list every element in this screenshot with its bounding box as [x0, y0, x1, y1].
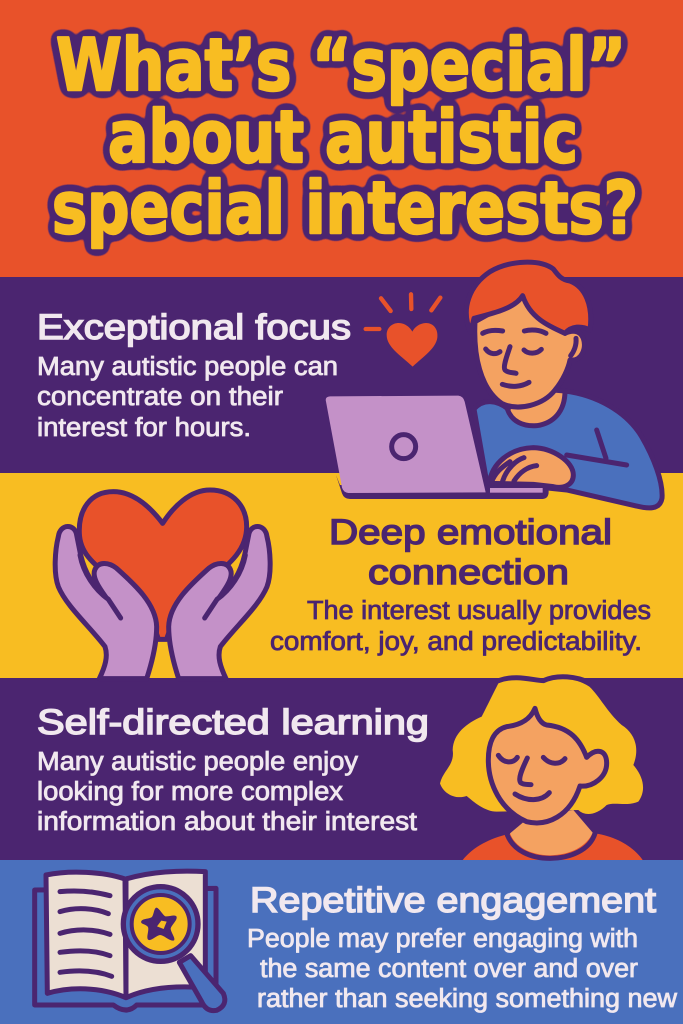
text block: repetitive engagement: Repetitive engagement: [250, 880, 656, 920]
text block: self-directed learning: Many autistic people enjoy: [37, 748, 358, 776]
text block: deep emotional connection: The interest usually provides: [307, 597, 651, 625]
hair: [440, 678, 643, 814]
neck: [507, 833, 595, 858]
text lines: [60, 891, 112, 976]
text block: exceptional focus: interest for hours.: [37, 414, 251, 442]
facial features: [498, 755, 565, 800]
text block: self-directed learning: information about their interest: [37, 808, 417, 836]
panel: deep emotional connection band: [0, 473, 683, 679]
icon: woman with curly hair: [440, 677, 643, 860]
text block: repetitive engagement: the same content over and over: [260, 955, 639, 983]
title: [52, 23, 638, 250]
panel: repetitive engagement band: [0, 860, 683, 1024]
hand on keyboard: [489, 448, 573, 487]
book cover: [35, 888, 216, 1010]
text block: deep emotional connection: connection: [368, 552, 569, 592]
text block: repetitive engagement: People may prefer engaging with: [247, 925, 638, 953]
text block: self-directed learning: Self-directed learning: [37, 702, 429, 742]
neck: [507, 388, 565, 426]
icon: hands holding heart: [55, 490, 270, 679]
hair: [466, 262, 591, 333]
text block: repetitive engagement: rather than seeking something new: [257, 985, 678, 1013]
magnifier glass: [123, 887, 198, 961]
text block: exceptional focus: Exceptional focus: [37, 307, 351, 347]
text block: exceptional focus: [37, 307, 351, 442]
title: about autistic: [108, 95, 578, 179]
panel: exceptional focus band: [0, 277, 683, 474]
heart: [79, 490, 247, 639]
ear detail: [571, 338, 576, 356]
laptop: [326, 396, 549, 499]
right hand: [169, 526, 270, 679]
text block: deep emotional connection: [270, 512, 651, 656]
icon: glowing heart: [366, 294, 440, 367]
icon: person at laptop with heart: [326, 262, 662, 508]
face: [475, 295, 584, 407]
facial features: [483, 330, 546, 386]
left hand: [55, 526, 157, 679]
panel: self-directed learning band: [0, 678, 683, 861]
left page: [46, 872, 126, 998]
hair outline: [498, 677, 589, 683]
text block: exceptional focus: concentrate on their: [37, 383, 284, 411]
face: [488, 708, 607, 823]
panel: title band: [0, 0, 683, 277]
text block: deep emotional connection: Deep emotional: [329, 512, 612, 552]
text block: self-directed learning: looking for more complex: [37, 778, 343, 806]
icon: open book with magnifying glass: [35, 871, 225, 1011]
sleeve creases: [567, 430, 627, 465]
star: [141, 908, 177, 941]
magnifier handle: [179, 956, 225, 1011]
shirt: [474, 391, 662, 508]
text block: self-directed learning: [37, 702, 429, 836]
right page: [126, 871, 205, 998]
text block: exceptional focus: Many autistic people can: [37, 353, 338, 381]
text block: deep emotional connection: comfort, joy, and predictability.: [270, 628, 642, 656]
text block: repetitive engagement: [247, 880, 678, 1013]
shirt: [463, 833, 643, 860]
